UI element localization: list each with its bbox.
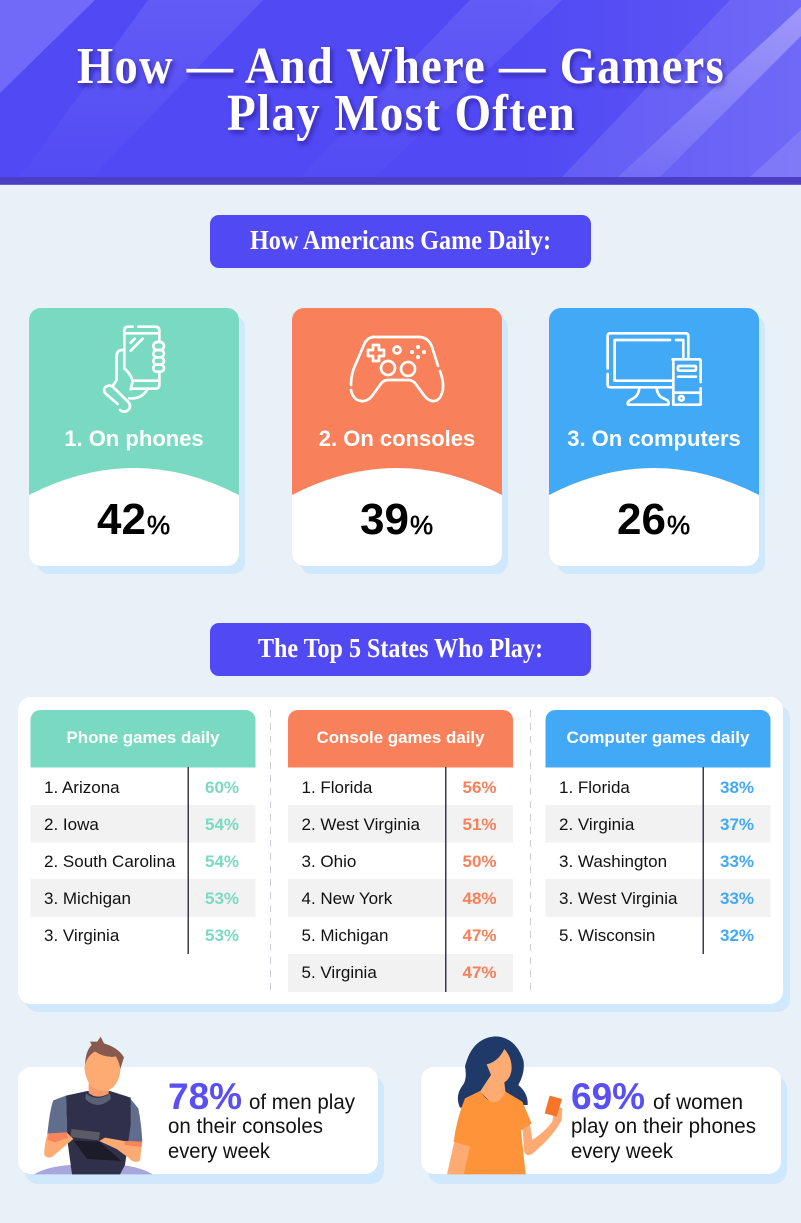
panel: on consoles — [292, 308, 508, 574]
table: phone games daily: 1. Arizona — [44, 778, 120, 797]
panel: on phones — [29, 308, 245, 574]
heading: the top 5 states who play: The Top 5 States Who Play: — [258, 633, 543, 663]
table: console games daily: 5. Michigan — [302, 926, 388, 945]
statistic text: of women — [653, 1091, 743, 1114]
illustration: man with controller — [34, 1037, 153, 1174]
label: 2. On consoles — [319, 426, 475, 451]
statistic text: 69% — [571, 1076, 645, 1117]
value: 42 — [97, 495, 146, 544]
heading: how Americans game daily — [210, 215, 591, 268]
header banner — [0, 0, 801, 185]
table: computer games daily: 3. Washington — [559, 852, 667, 871]
table: console games daily: 5. Virginia — [302, 963, 377, 982]
heading: the top 5 states who play — [210, 623, 591, 676]
table: console games daily: 1. Florida — [302, 778, 373, 797]
table: computer games daily — [546, 710, 770, 954]
heading: how Americans game daily: How Americans Game Daily: — [250, 225, 551, 255]
table: console games daily: 2. West Virginia — [302, 815, 420, 834]
panel: on computers — [549, 308, 765, 574]
table: phone games daily: Phone games daily — [66, 728, 220, 747]
table: console games daily: 47% — [462, 963, 497, 982]
title — [77, 38, 725, 142]
table: console games daily: 47% — [462, 926, 497, 945]
table: phone games daily: 53% — [205, 926, 239, 945]
table: phone games daily: 60% — [205, 778, 239, 797]
title: Play Most Often — [227, 85, 576, 142]
value: % — [410, 510, 433, 540]
icon: hand holding phone — [104, 327, 164, 412]
table: computer games daily: 5. Wisconsin — [559, 926, 655, 945]
value: 39 — [360, 495, 409, 544]
icon: desktop computer — [608, 333, 701, 405]
statistic text: every week — [168, 1140, 270, 1163]
statistic text: of men play — [249, 1091, 355, 1114]
statistic text: on their consoles — [168, 1115, 323, 1138]
table: phone games daily — [30, 710, 256, 954]
statistic text: play on their phones — [571, 1115, 756, 1138]
table: computer games daily: 2. Virginia — [559, 815, 635, 834]
table: console games daily: Console games daily — [316, 728, 485, 747]
table: computer games daily: 33% — [720, 852, 754, 871]
title: How — And Where — Gamers — [77, 38, 725, 95]
table: phone games daily: 2. Iowa — [44, 815, 99, 834]
table: console games daily: 51% — [462, 815, 497, 834]
table: phone games daily: 3. Michigan — [44, 889, 131, 908]
illustration: woman with phone — [447, 1036, 562, 1174]
table: computer games daily: 38% — [720, 778, 754, 797]
label: 3. On computers — [567, 426, 741, 451]
table: phone games daily: 53% — [205, 889, 239, 908]
table: phone games daily: 54% — [205, 815, 239, 834]
callout: women on phones — [421, 1036, 787, 1184]
table: console games daily: 56% — [462, 778, 497, 797]
table: console games daily: 48% — [462, 889, 497, 908]
statistic text — [168, 1076, 355, 1163]
value: % — [147, 510, 170, 540]
panel: top states tables — [18, 697, 790, 1012]
value — [617, 495, 690, 544]
table: console games daily — [288, 710, 513, 992]
table: phone games daily: 3. Virginia — [44, 926, 120, 945]
table: console games daily: 50% — [462, 852, 497, 871]
callout: men on consoles — [18, 1037, 384, 1184]
table: computer games daily: 33% — [720, 889, 754, 908]
value — [97, 495, 170, 544]
table: computer games daily: Computer games daily — [566, 728, 750, 747]
label: 1. On phones — [64, 426, 204, 451]
table: console games daily: 3. Ohio — [302, 852, 356, 871]
table: computer games daily: 32% — [720, 926, 754, 945]
table: computer games daily: 37% — [720, 815, 754, 834]
table: computer games daily: 1. Florida — [559, 778, 630, 797]
statistic text: 78% — [168, 1076, 242, 1117]
table: console games daily: 4. New York — [302, 889, 393, 908]
statistic text — [571, 1076, 756, 1163]
icon: game controller — [351, 337, 443, 401]
statistic text: every week — [571, 1140, 673, 1163]
value — [360, 495, 433, 544]
value: 26 — [617, 495, 666, 544]
value: % — [667, 510, 690, 540]
table: phone games daily: 54% — [205, 852, 239, 871]
table: computer games daily: 3. West Virginia — [559, 889, 678, 908]
table: phone games daily: 2. South Carolina — [44, 852, 176, 871]
